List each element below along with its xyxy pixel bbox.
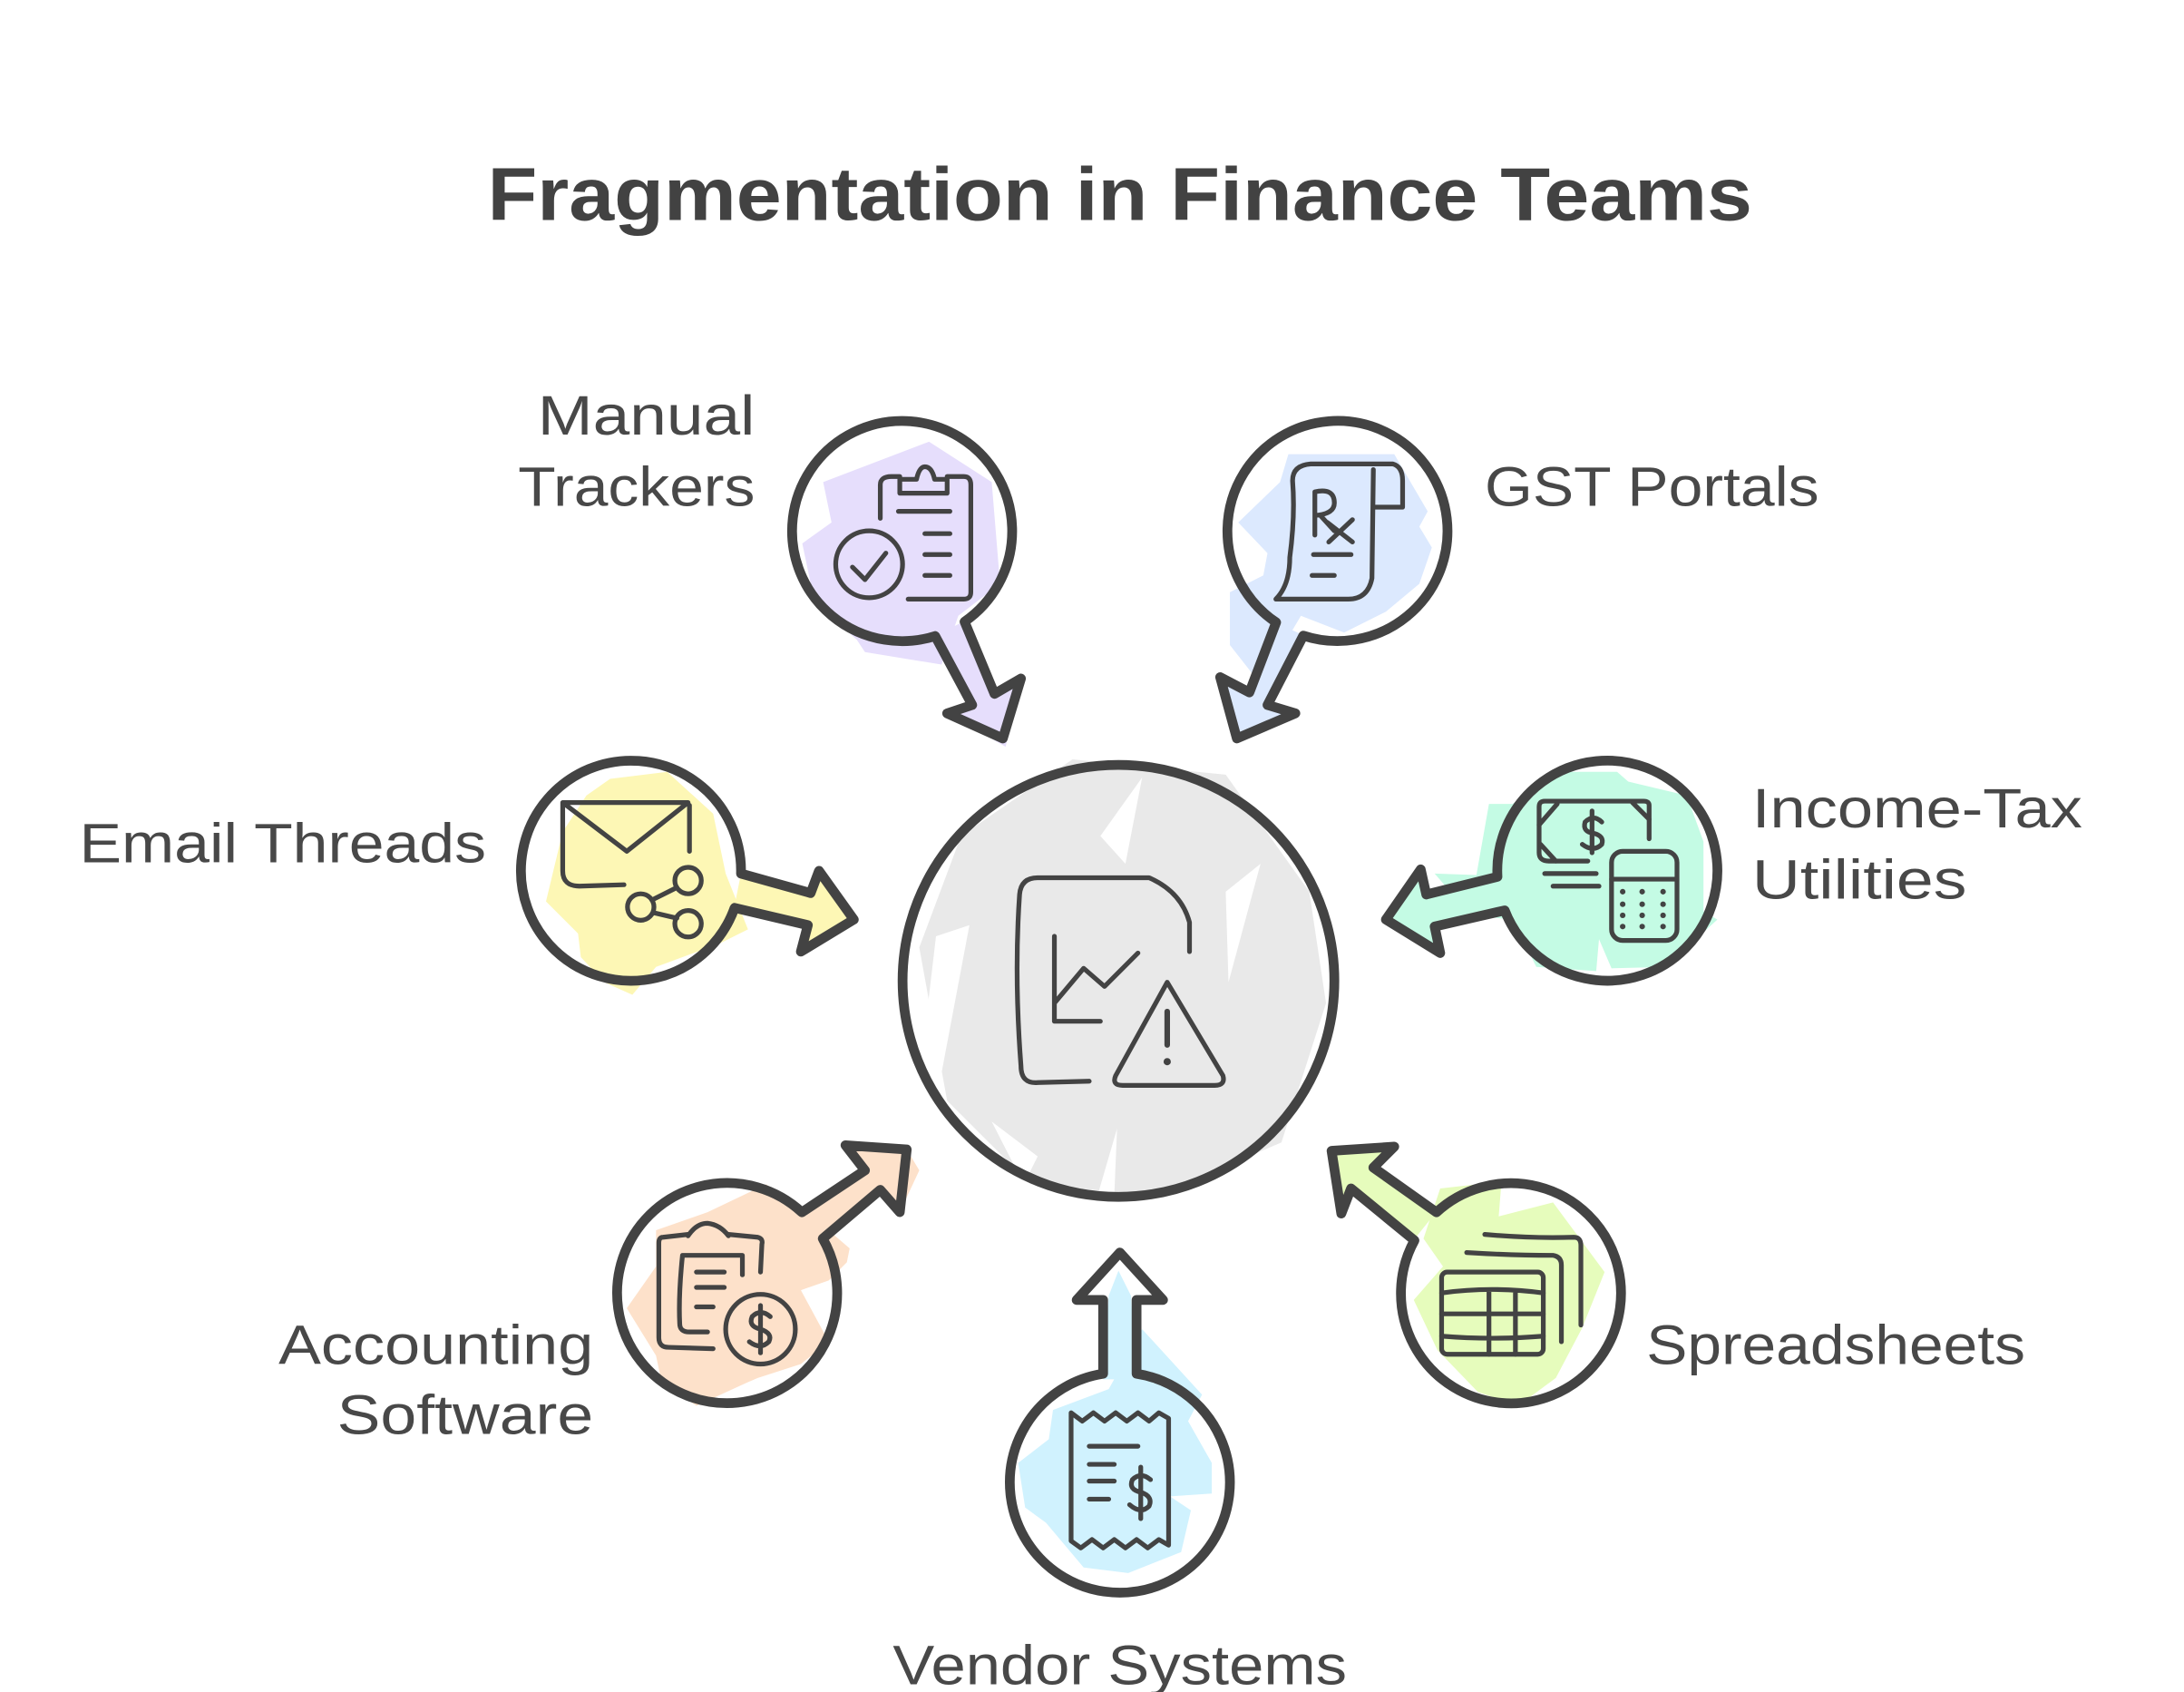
label: Email Threads: Email Threads	[80, 813, 486, 875]
label: Spreadsheets: Spreadsheets	[1646, 1314, 2025, 1376]
spoke: Accounting Software	[617, 1145, 920, 1406]
spoke: Manual Trackers	[792, 421, 1021, 747]
label: Accounting Software	[278, 1314, 593, 1446]
spoke: Spreadsheets	[1331, 1147, 1621, 1406]
icon: banknote and calculator	[1539, 801, 1677, 941]
icon: zigzag receipt with dollar	[1071, 1413, 1168, 1548]
label: Manual Trackers: Trackers	[518, 455, 755, 518]
title: Fragmentation in Finance Teams	[488, 152, 1752, 237]
label: Income-Tax Utilities: Utilities	[1752, 849, 1966, 912]
spoke: Income-Tax Utilities	[1386, 760, 1718, 981]
icon: report with warning	[1017, 878, 1224, 1085]
label: Income-Tax Utilities: Income-Tax	[1752, 778, 2082, 840]
spoke: Email Threads	[521, 760, 853, 995]
icon: clipboard with check	[835, 466, 970, 599]
label: Accounting Software: Accounting	[278, 1314, 593, 1376]
label: GST Portals: GST Portals	[1485, 455, 1819, 518]
icon: spreadsheet stack	[1441, 1235, 1581, 1355]
central hub: fragmented finance report	[902, 759, 1334, 1197]
label: Manual Trackers	[518, 385, 755, 518]
label: Accounting Software: Software	[337, 1384, 593, 1446]
label: Income-Tax Utilities	[1752, 778, 2082, 912]
icon: receipt scroll with Rx	[1276, 464, 1402, 599]
icon: envelope with share nodes	[562, 803, 701, 937]
spoke: GST Portals	[1220, 421, 1448, 738]
label: Manual Trackers: Manual	[538, 385, 755, 447]
spoke: Vendor Systems	[1009, 1253, 1230, 1592]
icon: clipboard with dollar coin	[658, 1223, 795, 1364]
